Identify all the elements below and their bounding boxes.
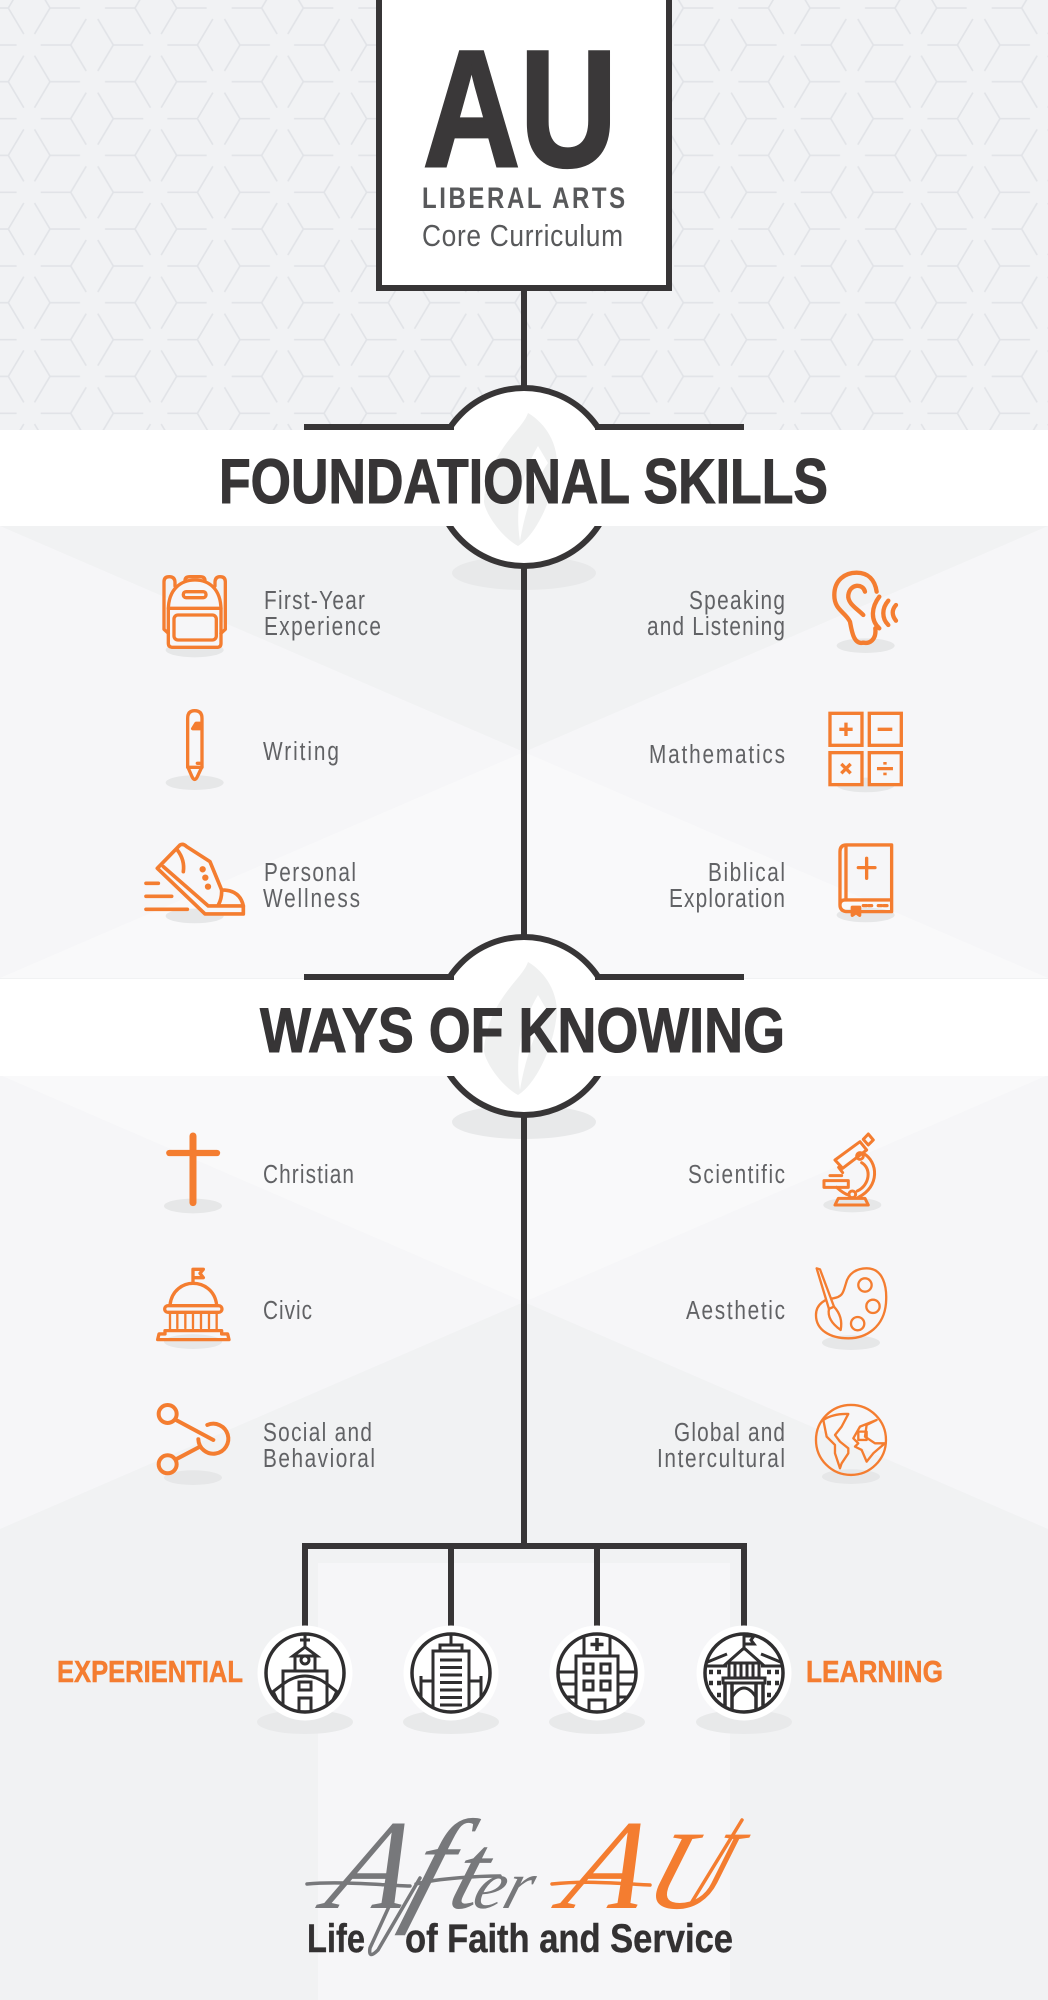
item: speaking and listening: and Listening [647,612,785,641]
icon: network nodes [159,1405,228,1485]
item: global and intercultural [657,1405,886,1484]
connector: central spine [521,288,527,1545]
script word: After: t [437,1812,509,1931]
icon: ear [834,573,896,653]
item: mathematics [649,713,901,792]
icon: globe [816,1405,886,1484]
logo: Liberal Arts: LIBERAL ARTS [422,180,625,215]
icon: office tower [403,1626,499,1734]
flourish: AU strokes [552,1820,742,1905]
heading: foundational skills: FOUNDATIONAL SKILLS [219,447,828,517]
item: biblical exploration: Biblical [708,858,785,887]
item: first-year experience: Experience [264,612,381,641]
item: writing [166,711,339,790]
tagline: of Faith and Service [405,1917,733,1961]
icon: microscope [823,1134,881,1212]
item: christian: Christian [263,1160,354,1189]
item: first-year experience: First-Year [264,586,365,615]
icon: hospital [549,1626,645,1734]
label: learning: LEARNING [806,1654,943,1689]
icon: capitol building [158,1269,229,1349]
item: speaking and listening: Speaking [689,586,785,615]
item: biblical exploration: Exploration [669,884,785,913]
icon: backpack [164,577,225,657]
tagline: Life [307,1917,365,1961]
script word: After: A [305,1795,438,1936]
section node: ways of knowing [0,937,1048,1139]
label: experiential: EXPERIENTIAL [57,1654,243,1689]
icon: church [257,1626,353,1734]
logo: Core Curriculum: Core Curriculum [422,219,623,254]
item: biblical exploration [669,845,895,922]
item: social and behavioral: Social and [263,1418,372,1447]
item: personal wellness [146,844,360,923]
background: hexagon pattern [0,0,1048,432]
item: scientific: Scientific [688,1160,785,1189]
logo: After AU [305,1795,764,1961]
background: foundational skills section [0,526,1048,978]
script word: AU: U [632,1809,760,1932]
item: global and intercultural: Intercultural [657,1444,785,1473]
item: speaking and listening [647,573,896,653]
logo: AU: AU [423,17,617,202]
flourish: After strokes [307,1876,500,1955]
item: social and behavioral [159,1405,375,1485]
background: lower section [0,1529,1048,2000]
item: civic [158,1269,312,1349]
item: social and behavioral: Behavioral [263,1444,375,1473]
icon: pen [166,711,224,790]
icon: paint palette [816,1268,886,1350]
item: global and intercultural: Global and [674,1418,785,1447]
script word: After: f [393,1795,489,1936]
item: civic: Civic [263,1296,312,1325]
script word: AU: A [541,1795,674,1936]
icon: calculator symbols [830,713,901,792]
item: aesthetic [686,1268,886,1350]
item: personal wellness: Personal [264,858,356,887]
background: ways of knowing section [0,1075,1048,1529]
item: christian [164,1136,354,1213]
icon: university hall [696,1626,792,1734]
icon: running shoe [146,844,243,923]
item: scientific [688,1134,881,1212]
item: first-year experience [164,577,381,657]
item: writing: Writing [263,737,339,766]
item: personal wellness: Wellness [263,884,360,913]
icon: bible [837,845,895,922]
item: mathematics: Mathematics [649,740,785,769]
logo box [379,0,669,288]
item: aesthetic: Aesthetic [686,1296,785,1325]
script word: After: er [465,1849,547,1924]
heading: ways of knowing: WAYS OF KNOWING [260,996,785,1066]
icon: cross [164,1136,222,1213]
connector: bottom branch [302,1543,747,1628]
tagline [307,1917,733,1961]
section node: foundational skills [0,388,1048,590]
